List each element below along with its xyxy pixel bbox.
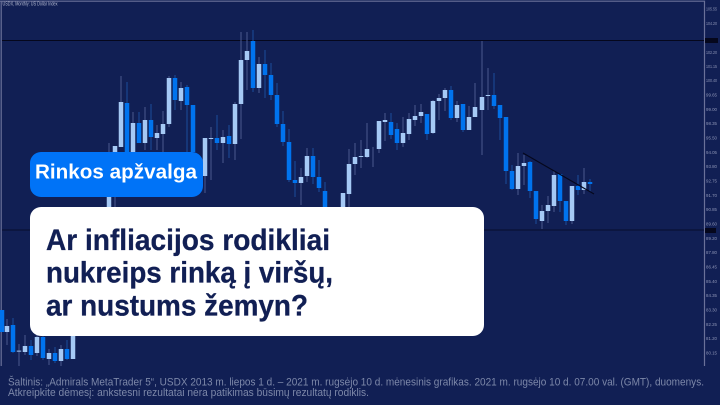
price axis: 86.45 bbox=[706, 264, 717, 270]
upper price level line bbox=[2, 40, 704, 42]
price axis: 81.20 bbox=[706, 336, 717, 341]
lower price tag bbox=[705, 228, 716, 233]
price axis: 105.55 bbox=[706, 7, 717, 12]
price axis: 83.30 bbox=[706, 308, 717, 312]
price axis: 94.05 bbox=[706, 150, 717, 155]
badge: Rinkos apžvalga: Rinkos apžvalga bbox=[35, 160, 198, 184]
headline panel: nukreips rinką į viršų, bbox=[46, 256, 333, 290]
price axis: 91.70 bbox=[706, 193, 717, 198]
price axis: 99.00 bbox=[706, 107, 717, 112]
price axis: 95.50 bbox=[706, 136, 717, 140]
trend line bbox=[523, 153, 594, 194]
price axis: 100.40 bbox=[706, 78, 717, 83]
price axis: 80.15 bbox=[706, 350, 717, 356]
price axis: 82.25 bbox=[706, 322, 717, 327]
price axis: 104.20 bbox=[706, 21, 717, 26]
source note: Atkreipkite dėmesį: ankstesni rezultatai nėra patikimas būsimų rezultatų rodiklis. bbox=[8, 387, 369, 399]
price axis: 89.60 bbox=[706, 222, 717, 226]
price axis: 98.35 bbox=[706, 121, 717, 126]
badge: Rinkos apžvalga bbox=[30, 152, 203, 197]
price axis: 102.20 bbox=[706, 50, 717, 55]
price axis: 99.65 bbox=[706, 92, 717, 98]
price axis: 85.40 bbox=[706, 279, 717, 284]
headline panel: Ar infliacijos rodikliai bbox=[46, 224, 330, 257]
headline panel bbox=[30, 207, 484, 336]
upper price tag bbox=[705, 38, 718, 43]
price axis: 101.15 bbox=[706, 64, 717, 69]
lower price level line bbox=[2, 229, 704, 231]
price axis: 93.80 bbox=[706, 164, 717, 169]
candlestick chart bbox=[2, 30, 590, 366]
price axis: 84.35 bbox=[706, 293, 717, 298]
price axis: 89.20 bbox=[706, 236, 717, 241]
price axis bbox=[706, 7, 717, 355]
price axis: 92.75 bbox=[706, 178, 717, 184]
headline panel: ar nustums žemyn? bbox=[46, 290, 308, 323]
chart title: USDX, Monthly: US Dollar Index bbox=[2, 2, 58, 8]
source note bbox=[8, 376, 704, 399]
price axis: 87.80 bbox=[706, 250, 717, 255]
price axis: 90.85 bbox=[706, 207, 717, 212]
